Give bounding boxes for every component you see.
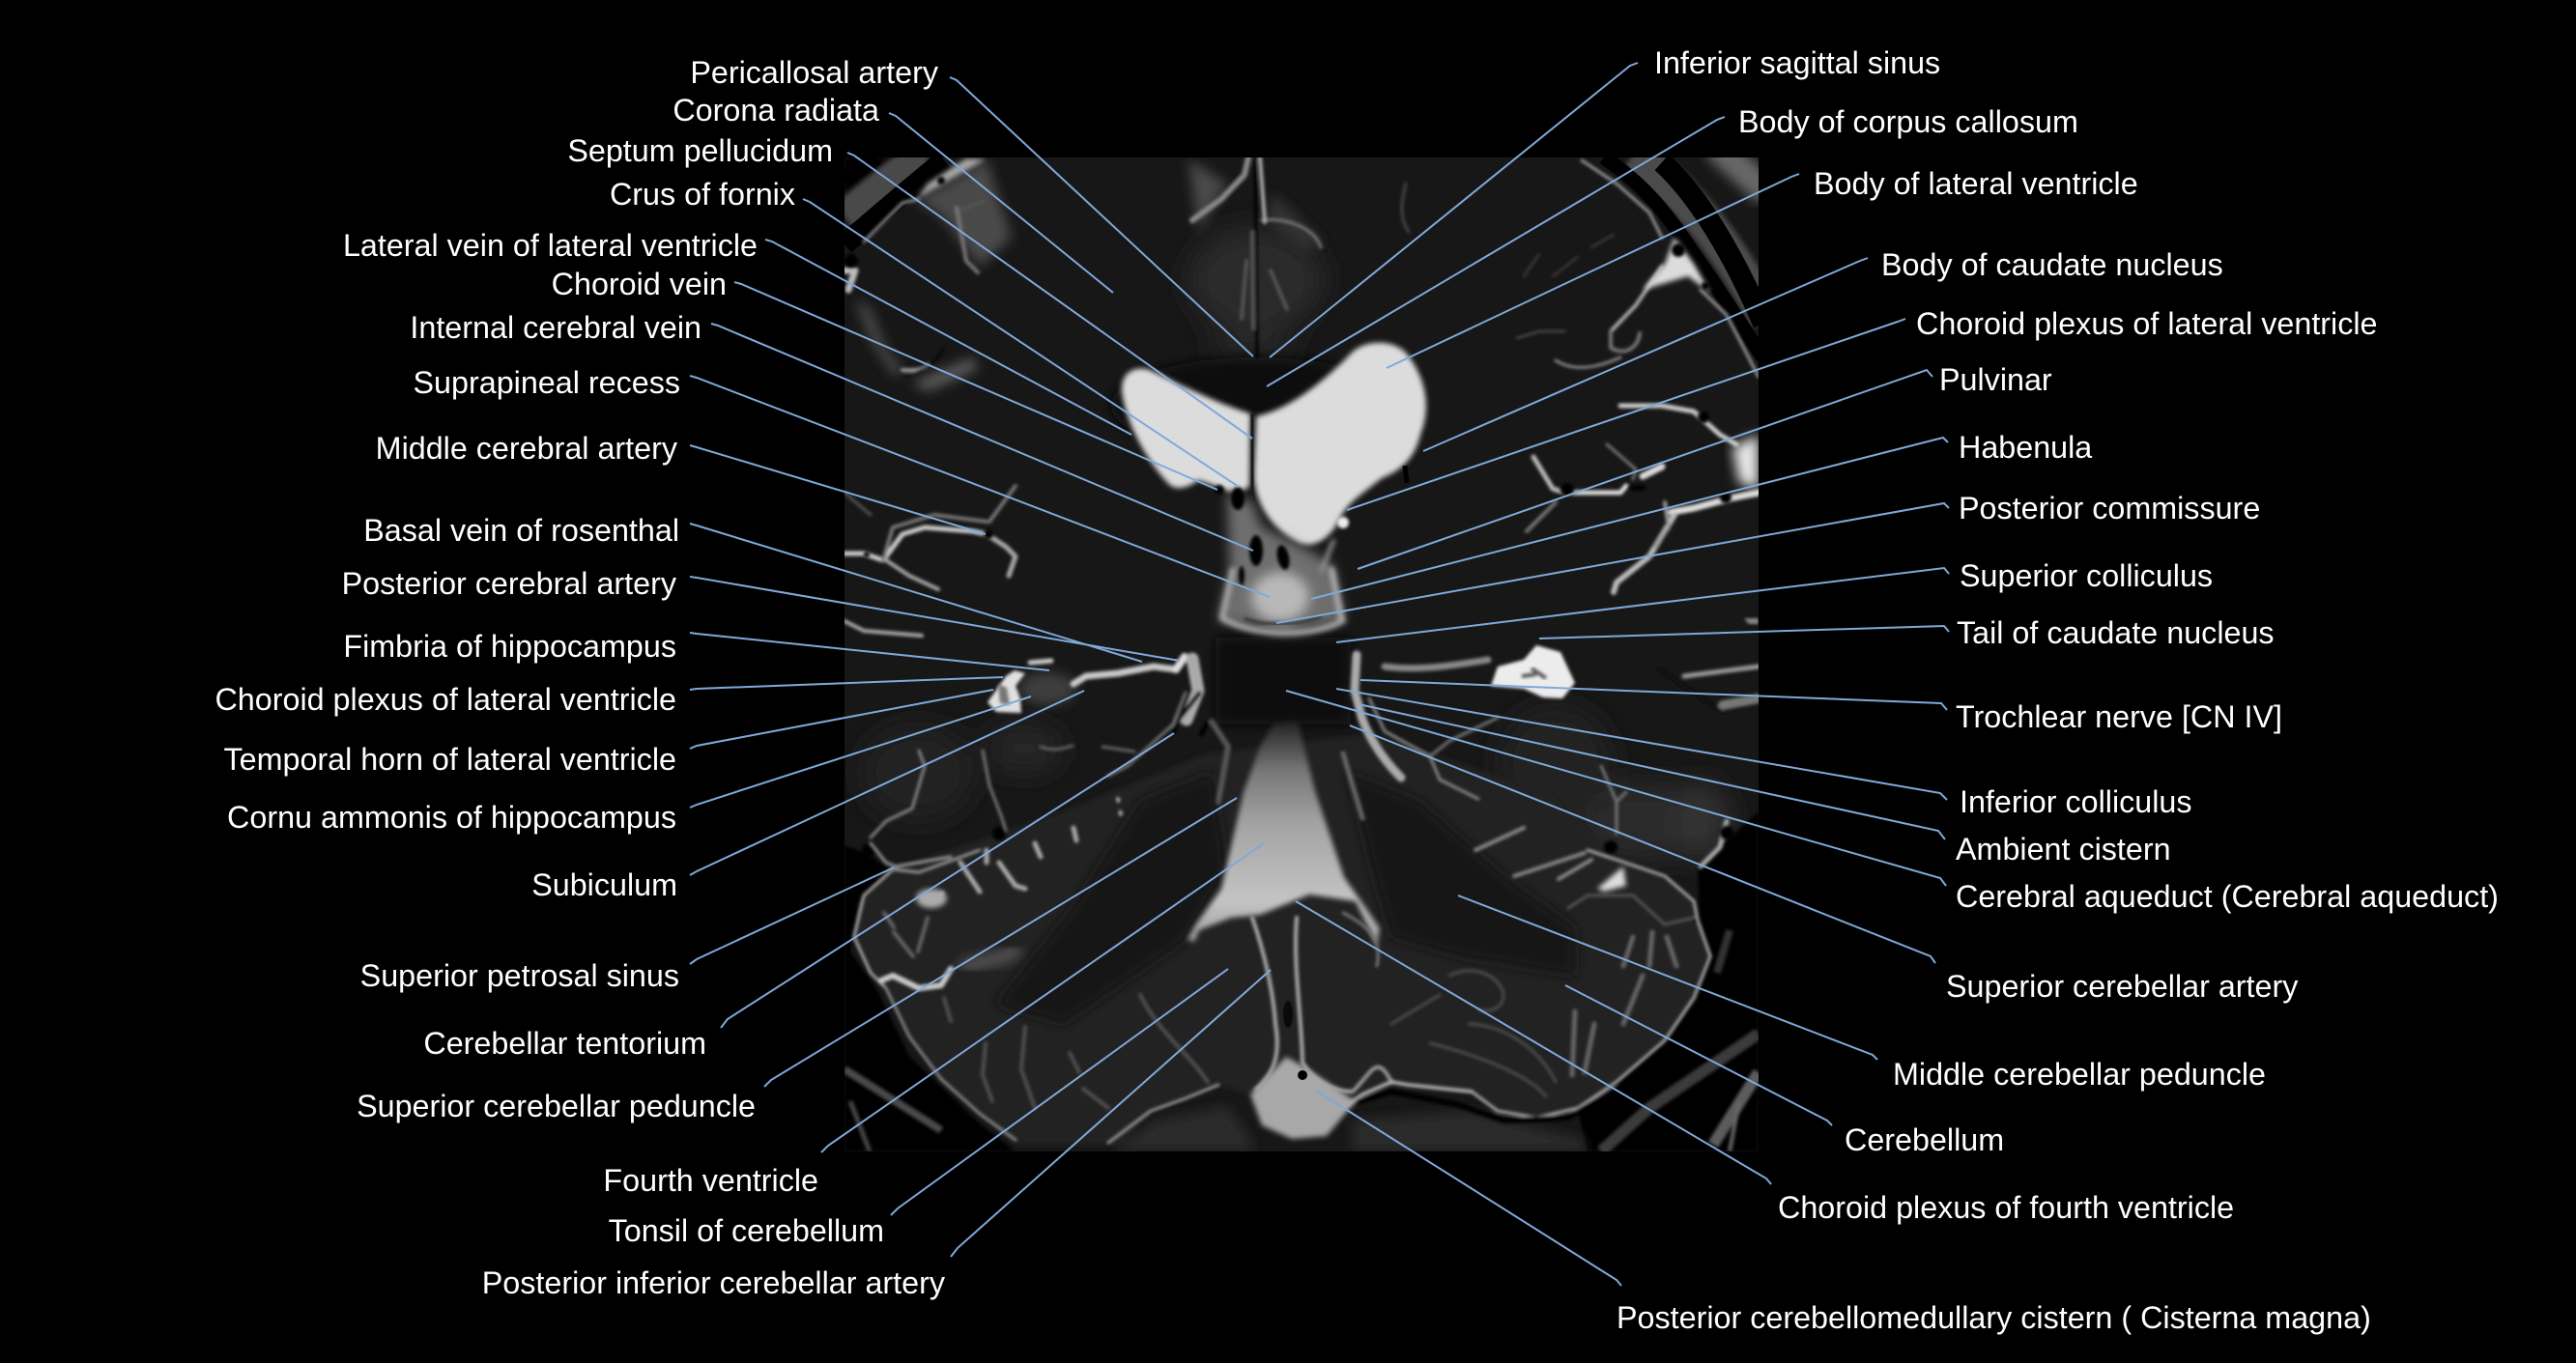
- right temporal horn: [1491, 645, 1575, 698]
- dark white matter and peduncles: [995, 357, 1575, 1024]
- callout: Corona radiata: Corona radiata: [673, 93, 879, 128]
- callout: Fimbria of hippocampus: [343, 629, 1049, 670]
- callout: Posterior cerebral artery: [342, 566, 1180, 661]
- skull-side CSF blob: [1643, 238, 1710, 293]
- callout: Superior cerebellar artery: Superior cerebellar artery: [1946, 969, 2299, 1004]
- fourth ventricle: [1188, 722, 1380, 946]
- flow voids: [844, 177, 1733, 923]
- callout: Superior colliculus: Superior colliculus: [1960, 558, 2213, 593]
- callout: Choroid vein: [552, 267, 1217, 490]
- callout: Temporal horn of lateral ventricle: Temporal horn of lateral ventricle: [223, 742, 676, 777]
- callout: Choroid plexus of lateral ventricle, left: Choroid plexus of lateral ventricle: [215, 682, 676, 717]
- callout: Posterior inferior cerebellar artery: Posterior inferior cerebellar artery: [482, 1265, 946, 1300]
- callout: Tonsil of cerebellum: [609, 969, 1228, 1248]
- callout: Cerebellum: Cerebellum: [1845, 1122, 2004, 1157]
- callout: Fimbria of hippocampus: Fimbria of hippocampus: [343, 629, 676, 664]
- callout: Crus of fornix: [610, 177, 1239, 487]
- callout: Crus of fornix: Crus of fornix: [610, 177, 795, 212]
- callout: Choroid plexus of lateral ventricle, left: [215, 677, 1003, 717]
- callout: Pulvinar: Pulvinar: [1939, 362, 2052, 397]
- callout: Superior cerebellar peduncle: Superior cerebellar peduncle: [357, 1089, 756, 1123]
- lateral ventricles: [1122, 343, 1426, 545]
- callout: Cornu ammonis of hippocampus: [227, 696, 1031, 835]
- callout: Body of lateral ventricle: [1387, 166, 2138, 368]
- callout: Choroid plexus of fourth ventricle: [1296, 901, 2234, 1225]
- choroid at right ventricle: [1337, 517, 1349, 528]
- callout: Basal vein of rosenthal: [363, 513, 1142, 662]
- callout: Tonsil of cerebellum: Tonsil of cerebellum: [609, 1213, 884, 1248]
- callout: Ambient cistern: Ambient cistern: [1956, 832, 2171, 866]
- callout: Septum pellucidum: [567, 133, 1252, 439]
- callout: Body of corpus callosum: [1267, 104, 2078, 386]
- callout: Subiculum: Subiculum: [531, 867, 677, 902]
- callout: Cerebral aqueduct: Cerebral aqueduct (Cerebral aqueduct): [1956, 879, 2499, 914]
- lobes: soft grey tissue: [860, 227, 1730, 860]
- callout: Middle cerebral artery: Middle cerebral artery: [376, 431, 678, 466]
- cerebellum tissue: [854, 734, 1710, 1145]
- callout: Suprapineal recess: [414, 365, 1270, 597]
- callout: Middle cerebral artery: [376, 431, 986, 534]
- callout: Body of corpus callosum: Body of corpus callosum: [1738, 104, 2078, 139]
- callout: Superior petrosal sinus: Superior petrosal sinus: [360, 958, 679, 993]
- lower-field soft tissue streaks: [844, 930, 1759, 1151]
- callout: Subiculum: [531, 691, 1084, 902]
- callout: Corona radiata: [673, 93, 1113, 293]
- callout: Tail of caudate nucleus: Tail of caudate nucleus: [1957, 615, 2275, 650]
- black regions outside the brain: [844, 157, 1759, 1151]
- callout: Internal cerebral vein: Internal cerebral vein: [410, 310, 701, 345]
- callout: Body of lateral ventricle: Body of lateral ventricle: [1814, 166, 2138, 201]
- callout: Choroid plexus of fourth ventricle: Choroid plexus of fourth ventricle: [1778, 1190, 2234, 1225]
- temporal horns and ambient cisterns: [1018, 672, 1076, 705]
- callout: Superior cerebellar peduncle: [357, 798, 1237, 1123]
- callout: Posterior cerebral artery: Posterior cerebral artery: [342, 566, 677, 601]
- callout: Tail of caudate nucleus: [1539, 615, 2275, 650]
- callout: Posterior commissure: [1276, 491, 2260, 623]
- callout: Pericallosal artery: [690, 55, 1253, 356]
- callout: Lateral vein of lateral ventricle: [343, 228, 1131, 435]
- callout: Habenula: [1311, 430, 2092, 599]
- callout: Fourth ventricle: [603, 843, 1264, 1198]
- callout: Body of caudate nucleus: [1423, 247, 2223, 451]
- occipital tissue below the cerebellum: [1111, 1106, 1585, 1151]
- callout: Inferior colliculus: Inferior colliculus: [1960, 784, 2192, 819]
- callout: Cornu ammonis of hippocampus: Cornu ammonis of hippocampus: [227, 800, 676, 835]
- pineal region and quadrigeminal cistern: [1218, 493, 1344, 633]
- cisterna magna and vallecula: [1250, 1057, 1356, 1139]
- callout: Inferior sagittal sinus: [1270, 45, 1940, 357]
- callout: Fourth ventricle: Fourth ventricle: [603, 1163, 818, 1198]
- left upper lobe bright patches: [855, 159, 1324, 391]
- callout: Habenula: Habenula: [1959, 430, 2092, 465]
- callout: Superior colliculus: [1336, 558, 2213, 642]
- callout: Cerebral aqueduct: [1286, 691, 2499, 914]
- callout: Body of caudate nucleus: Body of caudate nucleus: [1881, 247, 2223, 282]
- callout: Septum pellucidum: Septum pellucidum: [567, 133, 833, 168]
- callout: Trochlear nerve [CN IV]: [1360, 680, 2282, 734]
- callout: Internal cerebral vein: [410, 310, 1253, 551]
- callout: Inferior colliculus: [1336, 689, 2192, 819]
- bright sulci: lateral fissures: [844, 406, 1759, 866]
- callout: Middle cerebellar peduncle: Middle cerebellar peduncle: [1893, 1057, 2266, 1092]
- right callouts: [1267, 45, 2499, 1335]
- callout: Suprapineal recess: Suprapineal recess: [414, 365, 680, 400]
- callout: Posterior cerebellomedullary cistern (Cisterna magna): Posterior cerebellomedullary cistern ( Cisterna magna): [1617, 1300, 2371, 1335]
- callout: Choroid plexus of lateral ventricle, right: [1347, 306, 2378, 510]
- callout: Superior cerebellar artery: [1350, 725, 2299, 1004]
- callout: Lateral vein of lateral ventricle: Lateral vein of lateral ventricle: [343, 228, 758, 263]
- callout: Posterior inferior cerebellar artery: [482, 970, 1271, 1300]
- callout: Choroid vein: Choroid vein: [552, 267, 727, 301]
- callout: Cerebellum: [1565, 985, 2004, 1157]
- cerebellum outline and folia: [854, 746, 1710, 1143]
- callout: Posterior commissure: Posterior commissure: [1959, 491, 2260, 525]
- callout: Pericallosal artery: Pericallosal artery: [690, 55, 939, 90]
- callout: Temporal horn of lateral ventricle: [223, 690, 993, 777]
- callout: Trochlear nerve [CN IV]: Trochlear nerve [CN IV]: [1956, 699, 2282, 734]
- left callouts: [215, 55, 1271, 1300]
- callout: Basal vein of rosenthal: Basal vein of rosenthal: [363, 513, 679, 548]
- bright sulci: upper hemispheres: [844, 157, 1759, 377]
- septum pellucidum: [1250, 413, 1256, 502]
- skull bands and scalp: [844, 145, 1768, 357]
- callout: Inferior sagittal sinus: Inferior sagittal sinus: [1654, 45, 1940, 80]
- callout: Choroid plexus of lateral ventricle, right: Choroid plexus of lateral ventricle: [1916, 306, 2378, 341]
- aqueduct slit: [1272, 657, 1281, 717]
- callout: Middle cerebellar peduncle: [1458, 895, 2266, 1092]
- panel: axial T2 MRI scan: [844, 145, 1768, 1151]
- callout: Ambient cistern: [1359, 704, 2171, 866]
- callout: Cerebellar tentorium: Cerebellar tentorium: [423, 1026, 706, 1061]
- callout: Superior petrosal sinus: [360, 867, 894, 993]
- callout: Cerebellar tentorium: [423, 733, 1174, 1061]
- callout: Pulvinar: [1358, 362, 2052, 569]
- callout: Posterior cerebellomedullary cistern (Cisterna magna): [1316, 1091, 2371, 1335]
